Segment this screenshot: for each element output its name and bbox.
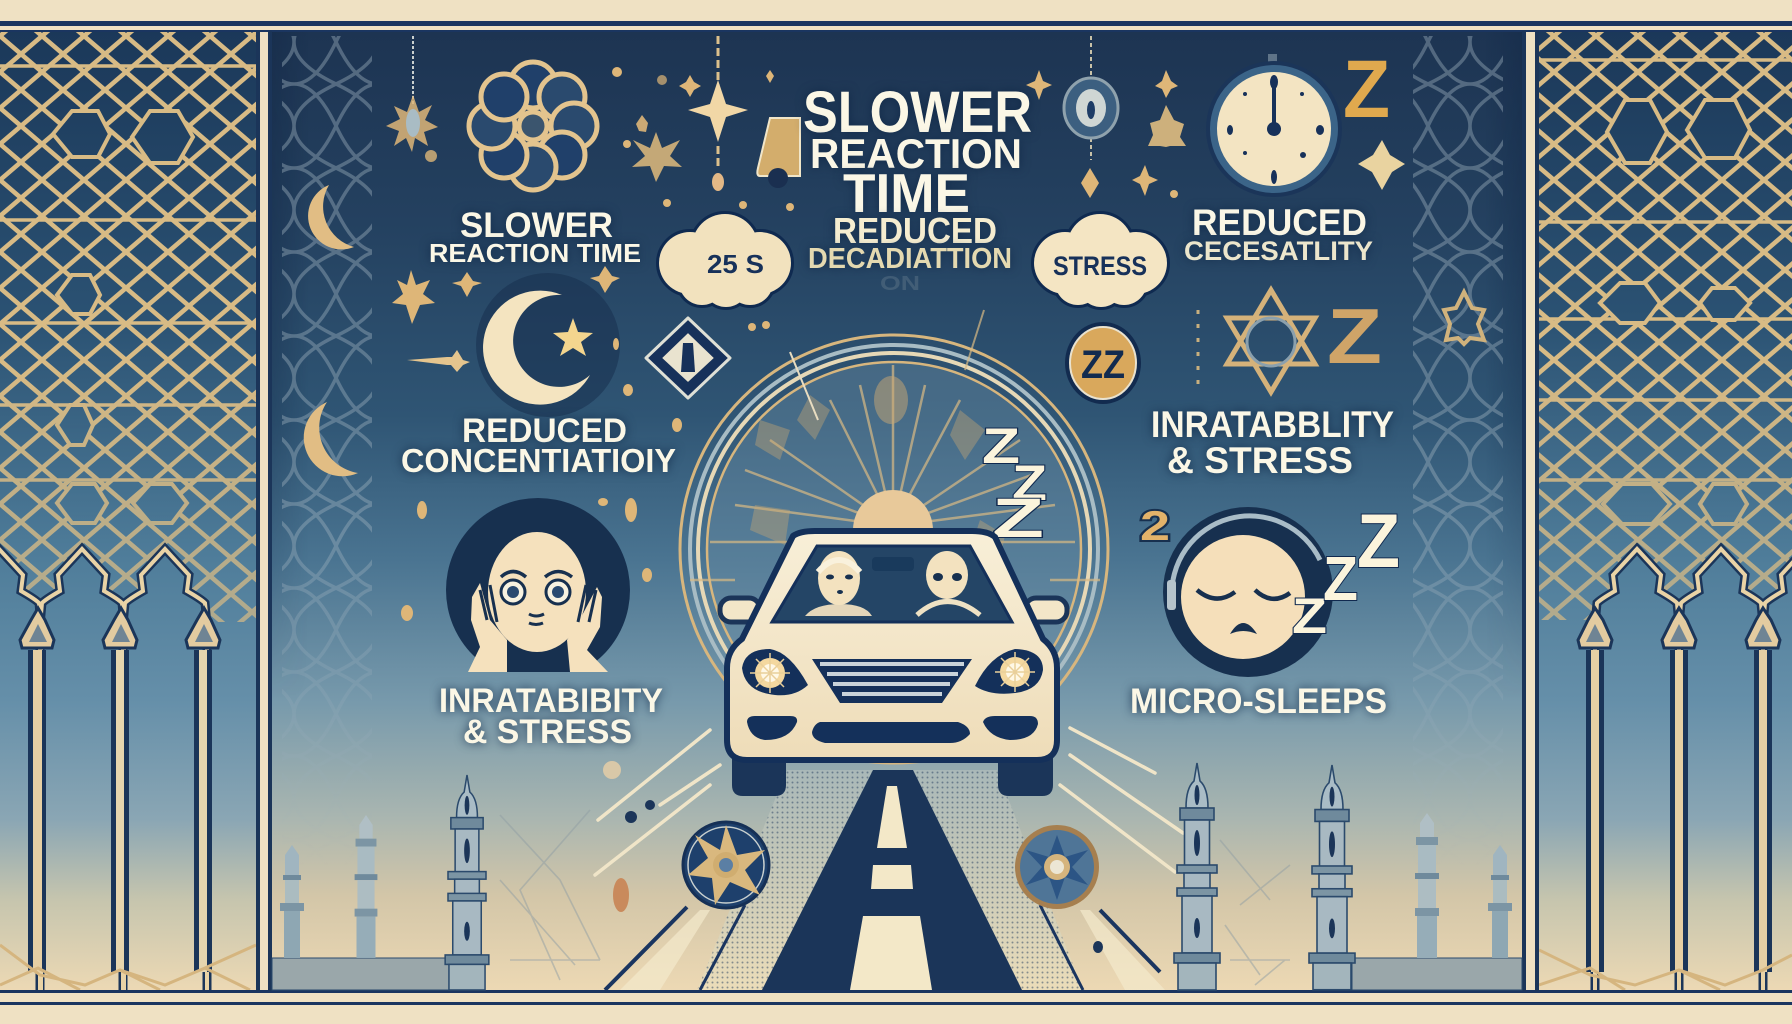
connector line from cloud	[790, 352, 818, 420]
mirrors	[720, 598, 1067, 622]
lower vents	[747, 716, 1038, 743]
text: slower reaction time left: REACTION TIME	[429, 238, 641, 268]
icon: ZZ coin: ZZ	[1081, 343, 1125, 387]
text: slower reaction time left	[429, 206, 641, 268]
passenger	[805, 551, 872, 616]
text: slower reaction time left: SLOWER	[460, 206, 613, 245]
arch bays	[1595, 549, 1792, 1019]
icon: ZZ coin	[1065, 322, 1141, 404]
icon: gold four-point star with pendant	[688, 36, 748, 191]
icon: gold star left	[392, 270, 435, 324]
icon: star in right strip	[1444, 292, 1484, 344]
letters: Z Z Z above car: Z	[982, 418, 1020, 474]
text: reduced concentration	[401, 412, 676, 479]
text: reduced cecesatlity: CECESATLITY	[1184, 236, 1373, 266]
text: reduced concentration: CONCENTIATIOIY	[401, 442, 676, 479]
text: micro-sleeps: MICRO-SLEEPS	[1130, 682, 1387, 721]
icon: hanging ornament with gold star left	[386, 36, 438, 162]
road	[762, 770, 1022, 990]
pillars	[1539, 608, 1792, 990]
icon: rosette	[469, 62, 597, 190]
edge shading	[272, 102, 1522, 614]
icon: six-point star	[1227, 290, 1315, 392]
letters: Z Z Z sleeping: Z	[1323, 545, 1358, 614]
halo rings behind car	[680, 310, 1108, 763]
icon: stress cloud	[1034, 214, 1167, 307]
title: centre heading: DECADIATTION	[808, 243, 1012, 275]
lattice	[1539, 31, 1792, 631]
panel: right lattice and arches	[1539, 31, 1792, 1019]
text: reduced cecesatlity	[1184, 202, 1373, 266]
grille	[812, 659, 972, 703]
side lattice strips	[282, 36, 1503, 698]
letter Z right of star: Z	[1327, 292, 1382, 380]
panel: left lattice and arches	[0, 31, 256, 1019]
icon: cloud 25 S: 25 S	[707, 249, 764, 279]
body	[727, 531, 1057, 760]
icon: medallion right on road	[1015, 825, 1099, 909]
icon: star upper right	[1148, 105, 1186, 147]
text: irritability and stress left	[439, 682, 663, 751]
icon: cloud 25 S	[659, 214, 791, 307]
icon: clock	[1208, 54, 1340, 195]
letters: Z Z Z above car	[982, 418, 1047, 549]
text: irritability and stress right: INRATABBLITY	[1151, 404, 1394, 445]
panel: centre background	[272, 31, 1522, 991]
sparkles around sign	[401, 321, 770, 621]
text: reduced cecesatlity: REDUCED	[1192, 202, 1367, 243]
icon: car	[720, 531, 1067, 796]
headlights	[742, 649, 1043, 695]
icon: medallion top right	[1064, 36, 1118, 160]
text: reduced concentration: REDUCED	[462, 412, 627, 450]
title: centre heading: ON	[880, 273, 920, 295]
text: irritability and stress right: & STRESS	[1167, 440, 1353, 481]
small gold sparkles upper left	[612, 67, 794, 211]
driver	[917, 551, 980, 615]
wheels	[732, 745, 1053, 796]
icon: gold star right of clock	[1358, 140, 1405, 190]
letters: Z Z Z above car: Z	[1012, 455, 1047, 511]
minaret silhouettes left	[272, 775, 489, 990]
road shoulders	[605, 770, 1165, 990]
title: centre heading: SLOWER	[803, 80, 1032, 145]
windshield	[772, 546, 1012, 622]
icon: medallion left on road	[683, 822, 769, 908]
letters: Z Z Z sleeping: Z	[1357, 499, 1400, 584]
icon: stressed face	[446, 498, 630, 682]
faint sketched lattice near ground	[500, 810, 1290, 985]
title: centre heading: TIME	[843, 162, 970, 224]
icon: road sign diamond	[646, 318, 730, 398]
icons: crescents left	[304, 185, 358, 476]
title: centre heading: REACTION	[810, 130, 1022, 177]
road speed lines	[595, 728, 1183, 875]
icon: crescent and star	[407, 266, 620, 417]
icon: truck	[757, 118, 800, 188]
letters: Z Z Z sleeping	[1292, 499, 1400, 644]
text: irritability and stress left: & STRESS	[463, 713, 632, 751]
lattice	[0, 31, 256, 631]
letters: Z Z Z sleeping: Z	[1292, 588, 1327, 644]
sparkles upper right	[1026, 70, 1178, 198]
dotted marker near star	[1196, 310, 1200, 384]
letters: Z Z Z above car: Z	[992, 486, 1044, 549]
minaret silhouettes right	[1174, 763, 1522, 990]
icon: stress cloud: STRESS	[1053, 251, 1147, 281]
text: irritability and stress right	[1151, 404, 1394, 481]
icon: sleeping face	[1163, 507, 1333, 677]
title: centre heading: REDUCED	[833, 210, 997, 251]
title: centre heading	[803, 80, 1032, 295]
icon: eight-point star left	[632, 132, 682, 182]
pillars	[0, 608, 256, 990]
letter Z clock: Z	[1343, 44, 1390, 135]
bottom scattered pins	[603, 761, 1103, 953]
arch bays	[0, 549, 207, 1019]
text: irritability and stress left: INRATABIBITY	[439, 682, 663, 720]
number 2: 2	[1140, 502, 1170, 549]
rays and sun	[690, 365, 1100, 580]
